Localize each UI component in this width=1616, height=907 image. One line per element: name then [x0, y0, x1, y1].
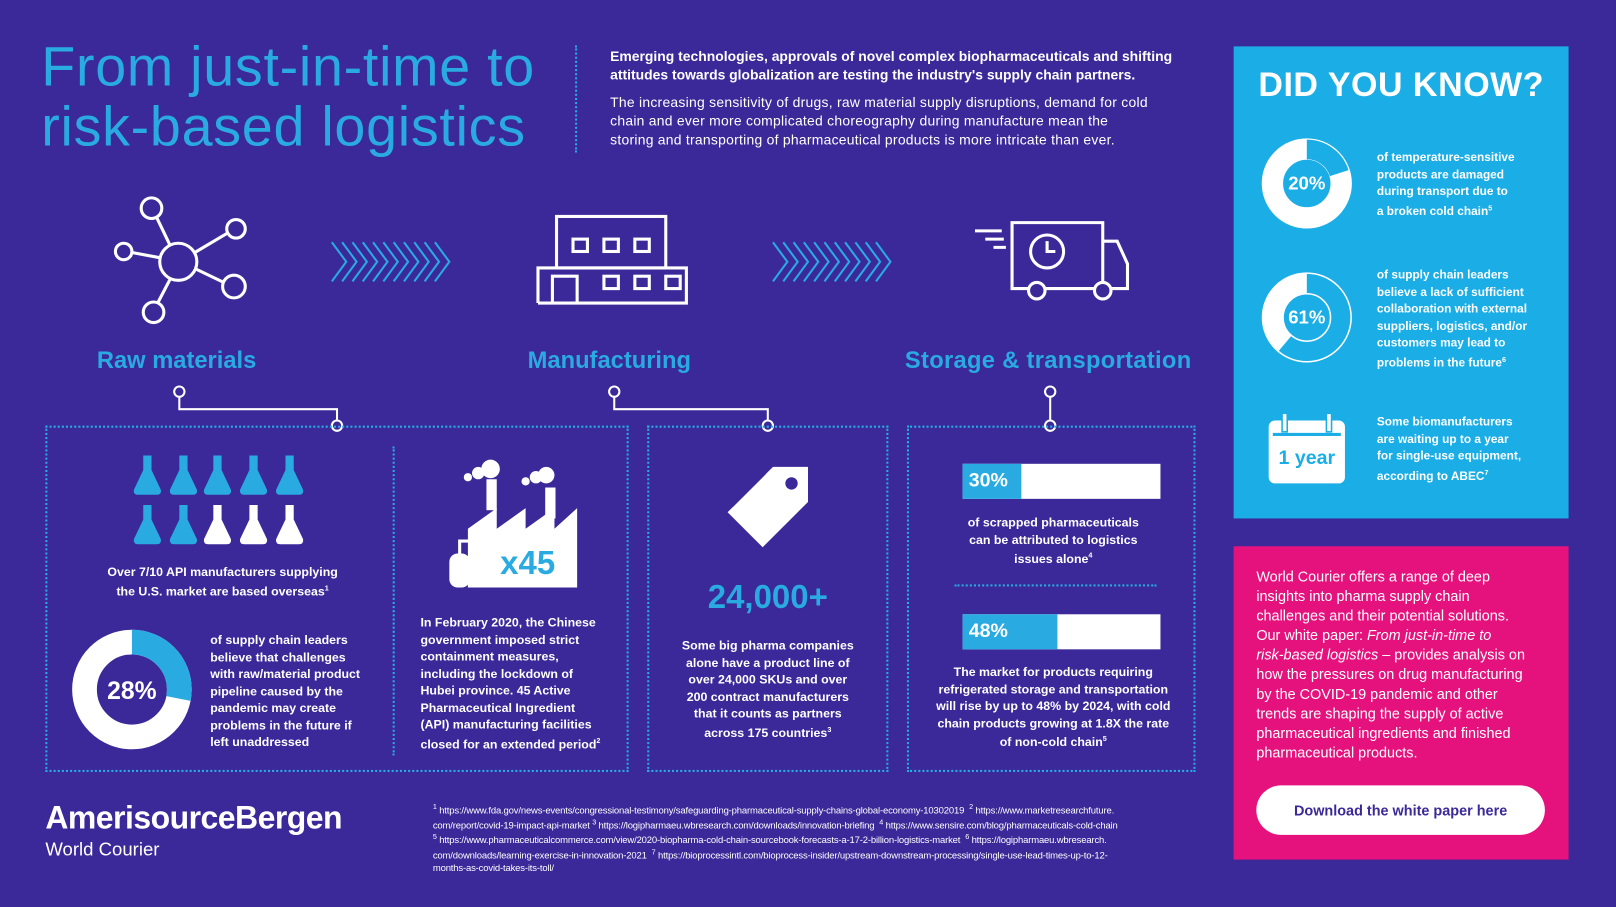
bar 48%: 48% [969, 620, 1008, 642]
text 61%: suppliers, logistics, and/or [1377, 320, 1527, 332]
text: pharmaceutical products. [1256, 744, 1418, 761]
text: API manufacturers: Over 7/10 API manufacturers supplying [107, 565, 338, 579]
panel: storage [907, 426, 1196, 772]
logo: AmerisourceBergen [45, 800, 342, 836]
text 48%: refrigerated storage and transportation [939, 682, 1168, 696]
button: Download the white paper here [1294, 802, 1507, 818]
text [1256, 568, 1525, 761]
intro text: storing and transporting of pharmaceutical products is more intricate than ever. [610, 132, 1115, 147]
text: SKUs: across 175 countries3 [704, 725, 831, 740]
text 30% [968, 515, 1139, 566]
chart: 28% donut [72, 630, 192, 750]
divider [393, 446, 395, 755]
title: From just-in-time to [41, 36, 535, 98]
text: by the COVID-19 pandemic and other [1256, 685, 1498, 702]
text: 28%: pipeline caused by the [210, 684, 343, 698]
text: 28%: believe that challenges [210, 650, 346, 664]
text: SKUs: 200 contract manufacturers [687, 689, 849, 703]
donut 20% [1262, 138, 1352, 228]
donut 20%: 20% [1288, 173, 1325, 194]
text: Hubei: government imposed strict [420, 632, 579, 647]
footnotes: com/report/covid-19-impact-api-market 3 https://logipharmaeu.wbresearch.com/downloads/innovation-briefing 4 https://www.sensire.com/blog/pharmaceuticals-cold-chain [433, 819, 1118, 830]
text 48%: chain products growing at 1.8X the rate [937, 716, 1169, 730]
text: Hubei: containment measures, [420, 649, 559, 664]
text 20%: during transport due to [1377, 186, 1508, 198]
text 30%: issues alone4 [1014, 551, 1092, 566]
text 30%: of scrapped pharmaceuticals [968, 515, 1139, 530]
text: Hubei: In February 2020, the Chinese [420, 615, 596, 630]
footnotes: months-as-covid-takes-its-toll/ [433, 863, 554, 873]
panel: did you know [1234, 46, 1569, 518]
panel: SKUs [647, 426, 888, 772]
icon: factory building [536, 214, 688, 305]
panel: raw materials & manufacturing box [45, 426, 629, 772]
text: SKUs [682, 638, 854, 740]
text: challenges and their potential solutions. [1256, 607, 1509, 624]
title [41, 36, 535, 158]
intro text: chain and ever more complicated choreography during manufacture mean the [610, 113, 1108, 129]
arrow chevrons 2 [772, 242, 892, 282]
arrow chevrons 1 [331, 242, 451, 282]
text 61%: believe a lack of sufficient [1377, 286, 1524, 298]
text: Hubei [420, 615, 600, 751]
icon: factory x45: x45 [500, 544, 555, 581]
icon: tag [728, 466, 808, 548]
text 1 year [1377, 416, 1521, 483]
heading: manufacturing: Manufacturing [528, 346, 691, 373]
text: Our white paper: From just-in-time to [1256, 627, 1491, 643]
footnotes: 5 https://www.pharmaceuticalcommerce.com/view/2020-biopharma-cold-chain-sourcebook-forecasts-a-17-2-billion-logistics-market 6 https://logipharmaeu.wbresearch. [433, 834, 1107, 845]
heading: raw materials: Raw materials [97, 346, 256, 373]
bar 30% [963, 464, 1160, 499]
text 1 year: are waiting up to a year [1377, 433, 1509, 446]
text: SKUs: that it counts as partners [694, 706, 842, 720]
divider vertical [575, 45, 577, 153]
text: SKUs: over 24,000 SKUs and over [688, 672, 847, 686]
text: Hubei: closed for an extended period2 [420, 736, 600, 751]
text 48%: will rise by up to 48% by 2024, with cold [936, 699, 1170, 713]
bar 48% [963, 614, 1160, 649]
text: Hubei: Pharmaceutical Ingredient [420, 700, 575, 715]
text: World Courier offers a range of deep [1256, 568, 1490, 584]
intro text: Emerging technologies, approvals of novel complex biopharmaceuticals and shifting [610, 48, 1172, 64]
text: Hubei: (API) manufacturing facilities [420, 717, 592, 732]
button [1256, 785, 1545, 835]
bar 30%: 30% [969, 470, 1008, 492]
stat 24,000+: 24,000+ [708, 578, 828, 615]
text: 28%: with raw/material product [210, 667, 360, 681]
text 61%: collaboration with external [1377, 303, 1527, 315]
icon: truck [974, 221, 1130, 300]
text 20%: products are damaged [1377, 169, 1504, 181]
icon: factory x45 [449, 460, 578, 588]
heading: DID YOU KNOW? [1258, 65, 1544, 103]
text 61%: problems in the future6 [1377, 356, 1506, 369]
text: 28%: problems in the future if [210, 718, 352, 732]
text 30%: can be attributed to logistics [969, 532, 1137, 547]
donut 61% [1262, 272, 1352, 362]
text: Hubei: including the lockdown of [420, 666, 573, 681]
text: 28%: of supply chain leaders [210, 633, 348, 647]
text 1 year: according to ABEC7 [1377, 469, 1488, 483]
text: pharmaceutical ingredients and finished [1256, 725, 1511, 741]
text: SKUs: Some big pharma companies [682, 638, 854, 652]
text: SKUs: alone have a product line of [686, 655, 850, 669]
text 1 year: Some biomanufacturers [1377, 416, 1513, 429]
text: API manufacturers [107, 565, 338, 598]
footnotes: com/downloads/learning-exercise-in-innovation-2021 7 https://bioprocessintl.com/bioprocess-insider/upstream-downstream-processing/single-use-lead-times-up-to-12- [433, 849, 1108, 860]
text 20%: of temperature-sensitive [1377, 152, 1515, 164]
logo [45, 800, 342, 860]
icon: calendar 1 year [1268, 414, 1345, 484]
connectors [173, 386, 1056, 432]
text 61%: customers may lead to [1377, 337, 1505, 349]
text: API manufacturers: the U.S. market are based overseas1 [116, 584, 329, 598]
text 20% [1377, 152, 1515, 218]
text 48%: of non-cold chain5 [1000, 735, 1107, 749]
intro text: The increasing sensitivity of drugs, raw material supply disruptions, demand for cold [610, 95, 1148, 110]
title: risk-based logistics [41, 96, 526, 158]
donut 61%: 61% [1288, 307, 1325, 328]
text: 28% [210, 633, 360, 749]
panel: white paper callout [1234, 546, 1569, 860]
text: how the pressures on drug manufacturing [1256, 666, 1523, 682]
heading: storage: Storage & transportation [905, 346, 1192, 373]
text 20%: a broken cold chain5 [1377, 205, 1492, 218]
text: 28%: pandemic may create [210, 701, 336, 715]
intro text: attitudes towards globalization are testing the industry's supply chain partners. [610, 67, 1135, 82]
text: 28%: left unaddressed [210, 735, 309, 749]
footnotes [433, 804, 1118, 873]
text 61%: of supply chain leaders [1377, 269, 1509, 281]
chart: 28% donut: 28% [107, 678, 157, 705]
text 48% [936, 665, 1170, 749]
icon: calendar 1 year: 1 year [1279, 447, 1335, 469]
text: risk-based logistics – provides analysis on [1256, 646, 1525, 663]
footnotes: 1 https://www.fda.gov/news-events/congressional-testimony/safeguarding-pharmaceutical-supply-chains-global-economy-10302019 2 https://www.marketresearchfuture. [433, 804, 1114, 815]
text: trends are shaping the supply of active [1256, 705, 1503, 721]
text 61% [1377, 269, 1527, 369]
text: insights into pharma supply chain [1256, 587, 1470, 604]
flask icons [134, 456, 304, 544]
icon: network [114, 196, 247, 324]
text: Hubei: Hubei province. 45 Active [420, 683, 571, 698]
logo: World Courier [45, 839, 159, 860]
text 1 year: for single-use equipment, [1377, 450, 1521, 463]
intro text [610, 48, 1172, 148]
text 48%: The market for products requiring [954, 665, 1153, 679]
